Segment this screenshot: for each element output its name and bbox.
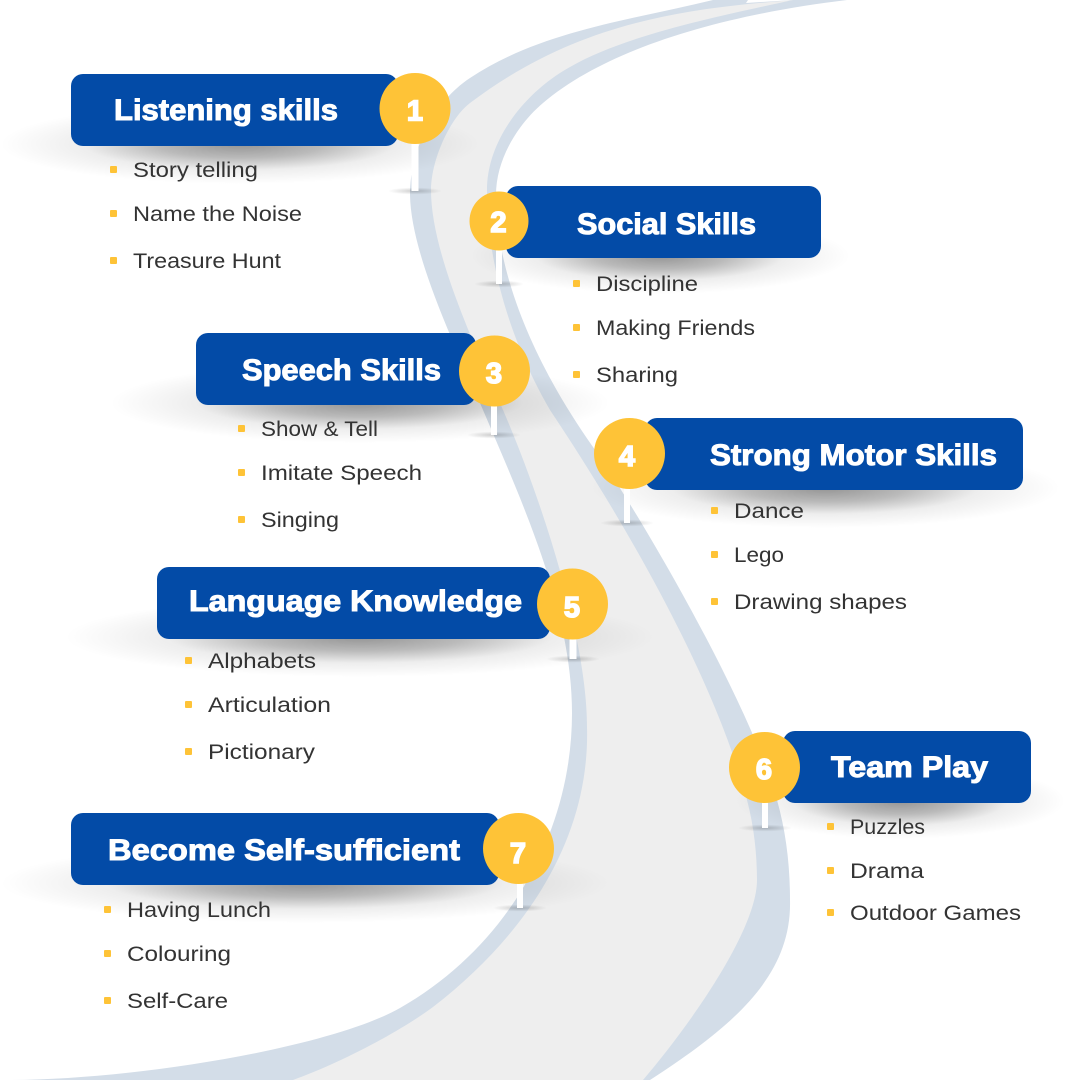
- panel: speech skills: [196, 333, 530, 532]
- list: social activities: Sharing: [596, 363, 678, 387]
- panel: strong motor skills: [594, 418, 1023, 614]
- badge 5: 5: [564, 592, 580, 624]
- list: team activities: Drama: [850, 859, 924, 883]
- heading: become self-sufficient: Become Self-sufficient: [108, 834, 460, 867]
- badge 4: 4: [619, 441, 635, 473]
- list: motor activities: [711, 499, 907, 614]
- list: self-sufficiency activities: Colouring: [127, 942, 231, 966]
- panel: language knowledge: [157, 567, 608, 764]
- panel: become self-sufficient: [71, 813, 554, 1013]
- list: listening activities: Name the Noise: [133, 202, 302, 226]
- badge 6: 6: [756, 754, 772, 786]
- list: speech activities: Show & Tell: [261, 417, 378, 441]
- list: language activities: Articulation: [208, 693, 331, 717]
- list: speech activities: [238, 417, 422, 532]
- panel: team play: [729, 731, 1031, 925]
- list: self-sufficiency activities: [104, 898, 271, 1013]
- badge 4: [594, 418, 665, 489]
- list: motor activities: Lego: [734, 543, 784, 567]
- list: team activities: Puzzles: [850, 815, 925, 839]
- list: social activities: Discipline: [596, 272, 698, 296]
- list: language activities: [185, 649, 331, 764]
- list: language activities: Alphabets: [208, 649, 316, 673]
- heading: listening skills: Listening skills: [114, 94, 338, 127]
- list: motor activities: Drawing shapes: [734, 590, 907, 614]
- list: speech activities: Singing: [261, 508, 339, 532]
- list: social activities: [573, 272, 755, 387]
- list: social activities: Making Friends: [596, 316, 755, 340]
- list: team activities: [827, 815, 1021, 925]
- list: self-sufficiency activities: Self-Care: [127, 989, 228, 1013]
- badge 2: 2: [490, 207, 507, 239]
- list: team activities: Outdoor Games: [850, 901, 1021, 925]
- list: listening activities: [110, 158, 302, 273]
- badge 3: 3: [486, 358, 502, 390]
- list: listening activities: Story telling: [133, 158, 258, 182]
- banner shadows: [0, 104, 1065, 923]
- heading: strong motor skills: Strong Motor Skills: [710, 439, 997, 472]
- list: motor activities: Dance: [734, 499, 804, 523]
- panel: listening skills: [71, 73, 450, 273]
- badge 2: [470, 192, 528, 250]
- heading: language knowledge: Language Knowledge: [189, 585, 522, 618]
- badge 1: 1: [407, 96, 423, 128]
- badge 7: 7: [510, 838, 526, 870]
- badge 7: [483, 813, 554, 884]
- heading: social skills: Social Skills: [577, 208, 756, 241]
- badge 6: [729, 732, 800, 803]
- list: self-sufficiency activities: Having Lunch: [127, 898, 271, 922]
- heading: team play: Team Play: [831, 751, 988, 784]
- heading: speech skills: Speech Skills: [242, 354, 441, 387]
- list: speech activities: Imitate Speech: [261, 461, 422, 485]
- list: listening activities: Treasure Hunt: [133, 249, 281, 273]
- panel: social skills: [470, 186, 821, 387]
- list: language activities: Pictionary: [208, 740, 315, 764]
- badge 1: [380, 73, 450, 144]
- badge 5: [537, 568, 608, 640]
- badge 3: [459, 336, 530, 406]
